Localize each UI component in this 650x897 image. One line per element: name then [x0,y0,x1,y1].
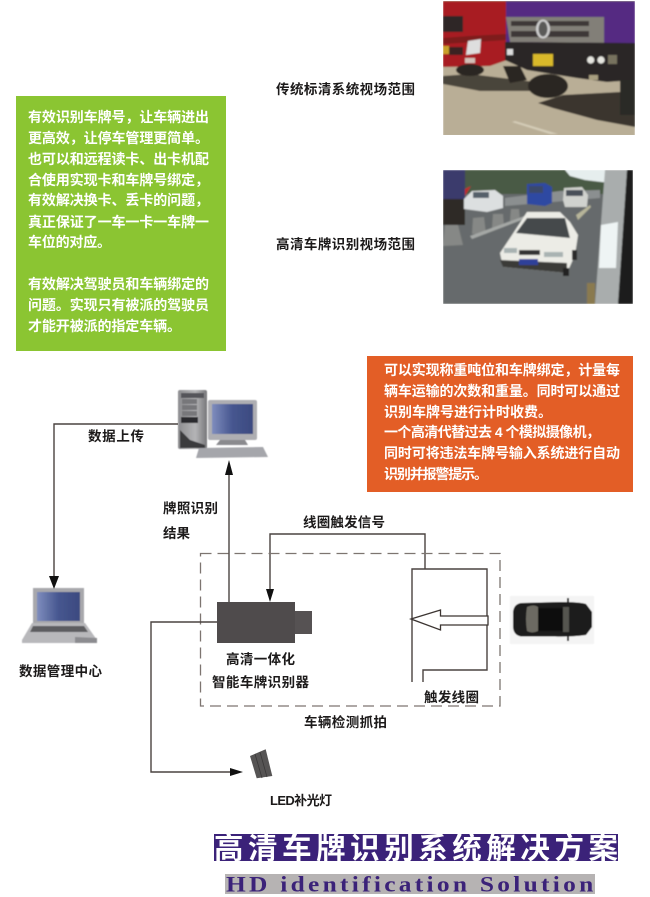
arrow: coil trigger signal [266,534,425,602]
panel: orange benefits: 识别并报警提示。 [384,466,488,482]
title: Chinese solution heading: 高清车牌识别系统解决方案 [214,832,618,866]
label: coil trigger signal: 线圈触发信号 [303,514,385,530]
label: plate recognition result: 结果 [163,525,190,541]
panel: green benefits: 问题。实现只有被派的驾驶员 [28,297,209,313]
panel: orange benefits: 同时可将违法车牌号输入系统进行自动 [384,445,620,461]
label: vehicle detection capture: 车辆检测抓拍 [304,714,387,730]
dashed detection zone [200,554,500,706]
panel: orange benefits [367,356,633,492]
arrow: plate result upward [225,460,233,602]
label: data management centre: 数据管理中心 [19,663,102,679]
label: data upload: 数据上传 [88,428,144,444]
icon: desktop computer [178,390,268,458]
label: trigger coil: 触发线圈 [424,689,479,705]
photo: HD view of road and white car [443,170,633,304]
trigger coil loop [412,569,487,682]
icon: laptop [22,588,97,643]
icon: camera [217,602,312,643]
label: LED fill light: LED补光灯 [270,793,332,808]
panel: green benefits: 更高效，让停车管理更简单。 [28,130,209,146]
arrow: data upload line [49,424,178,589]
label: HD view: 高清车牌识别视场范围 [276,236,415,252]
panel: green benefits: 才能开被派的指定车辆。 [28,318,181,334]
panel: green benefits: 车位的对应。 [28,234,111,250]
label: plate recognition result [163,500,218,541]
icon: car top view [510,596,594,644]
panel: orange benefits: 识别车牌号进行计时收费。 [384,404,552,420]
label: HD integrated recogniser [212,651,310,690]
label: HD integrated recogniser: 智能车牌识别器 [212,674,310,690]
label: plate recognition result: 牌照识别 [163,500,218,516]
icon: LED fill light [250,749,272,778]
label: HD integrated recogniser: 高清一体化 [226,651,296,667]
panel: orange benefits: 辆车运输的次数和重量。同时可以通过 [384,383,620,399]
panel: green benefits: 有效解决驾驶员和车辆绑定的 [28,276,209,292]
panel: green benefits: 有效识别车牌号，让车辆进出 [28,109,209,125]
photo: standard definition view of trucks [443,0,635,136]
arrow: line to LED light [151,622,243,776]
panel: green benefits: 合使用实现卡和车牌号绑定， [28,172,209,188]
panel: orange benefits: 可以实现称重吨位和车牌绑定，计量每 [384,362,620,378]
panel: green benefits: 真正保证了一车一卡一车牌一 [28,214,209,230]
panel: orange benefits: 一个高清代替过去 4 个模拟摄像机， [384,424,600,440]
panel: green benefits [16,96,226,351]
panel: green benefits: 也可以和远程读卡、出卡机配 [28,151,209,167]
panel: green benefits: 有效解决换卡、丢卡的问题， [28,192,209,208]
arrow: vehicle direction [411,610,488,630]
title: English solution heading: HD identification Solution [226,873,593,897]
label: standard view: 传统标清系统视场范围 [276,81,415,97]
